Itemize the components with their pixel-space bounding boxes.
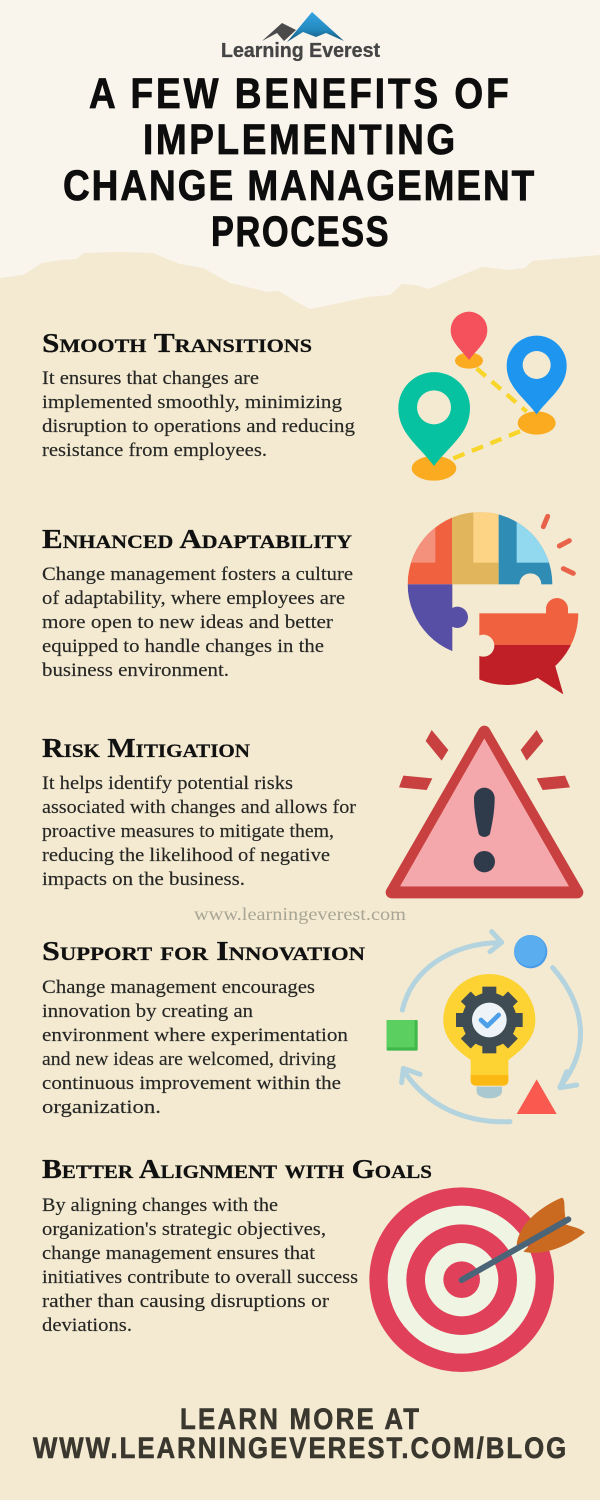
icon: map pins [398, 312, 567, 481]
title [63, 70, 535, 256]
footer call to action [33, 1402, 566, 1464]
body text: deviations. [42, 1315, 132, 1336]
body text: Change management fosters a culture [42, 564, 353, 585]
footer call to action: LEARN MORE AT [180, 1402, 419, 1435]
body text: and new ideas are welcomed, driving [42, 1049, 337, 1070]
icon: puzzle head with speech bubble [408, 512, 579, 694]
body text: continuous improvement within the [42, 1073, 341, 1094]
title: IMPLEMENTING [143, 116, 455, 164]
heading: Risk Mitigation [42, 733, 250, 763]
body text: It ensures that changes are [42, 368, 259, 389]
title: PROCESS [211, 208, 389, 256]
body text: resistance from employees. [42, 440, 267, 461]
watermark: www.learningeverest.com [194, 904, 406, 924]
body text: business environment. [42, 660, 229, 681]
logo: wordmark: Learning Everest [221, 40, 380, 62]
body text: impacts on the business. [42, 869, 245, 890]
panel: support for innovation [42, 932, 580, 1122]
body text: equipped to handle changes in the [42, 636, 324, 657]
panel: smooth transitions [42, 312, 567, 481]
body text [42, 977, 349, 1118]
body text: Change management encourages [42, 977, 315, 998]
heading: Smooth Transitions [42, 328, 312, 358]
logo [221, 12, 380, 62]
body text: associated with changes and allows for [42, 797, 357, 818]
icon: warning triangle [392, 730, 577, 892]
background: cream header [0, 0, 600, 320]
body text: rather than causing disruptions or [42, 1291, 330, 1312]
body text: innovation by creating an [42, 1001, 254, 1022]
body text: organization. [42, 1097, 161, 1118]
body text: of adaptability, where employees are [42, 588, 345, 609]
body text: proactive measures to mitigate them, [42, 821, 334, 842]
panel: better alignment with goals [42, 1154, 585, 1372]
body text: organization's strategic objectives, [42, 1219, 326, 1240]
panel: enhanced adaptability [42, 512, 579, 694]
body text: initiatives contribute to overall success [42, 1267, 358, 1288]
body text: implemented smoothly, minimizing [42, 392, 343, 413]
body text: more open to new ideas and better [42, 612, 334, 633]
footer call to action: WWW.LEARNINGEVEREST.COM/BLOG [33, 1431, 566, 1464]
heading: Enhanced Adaptability [42, 524, 352, 554]
body text: change management ensures that [42, 1243, 316, 1264]
body text [42, 368, 356, 461]
body text: reducing the likelihood of negative [42, 845, 330, 866]
body text: environment where experimentation [42, 1025, 349, 1046]
heading: Support for Innovation [42, 936, 365, 966]
title: A FEW BENEFITS OF [89, 70, 509, 118]
body text: It helps identify potential risks [42, 773, 293, 794]
title: CHANGE MANAGEMENT [63, 162, 535, 210]
body text [42, 773, 357, 890]
body text: disruption to operations and reducing [42, 416, 356, 437]
body text [42, 564, 353, 681]
logo: grey mountain [262, 23, 296, 41]
panel: risk mitigation [42, 730, 577, 892]
body text [42, 1195, 358, 1336]
heading: Better Alignment with Goals [42, 1154, 432, 1184]
icon: target with arrow [369, 1187, 585, 1372]
body text: By aligning changes with the [42, 1195, 278, 1216]
icon: light bulb with gear and cycle [387, 932, 580, 1122]
logo: blue mountain [287, 12, 344, 42]
